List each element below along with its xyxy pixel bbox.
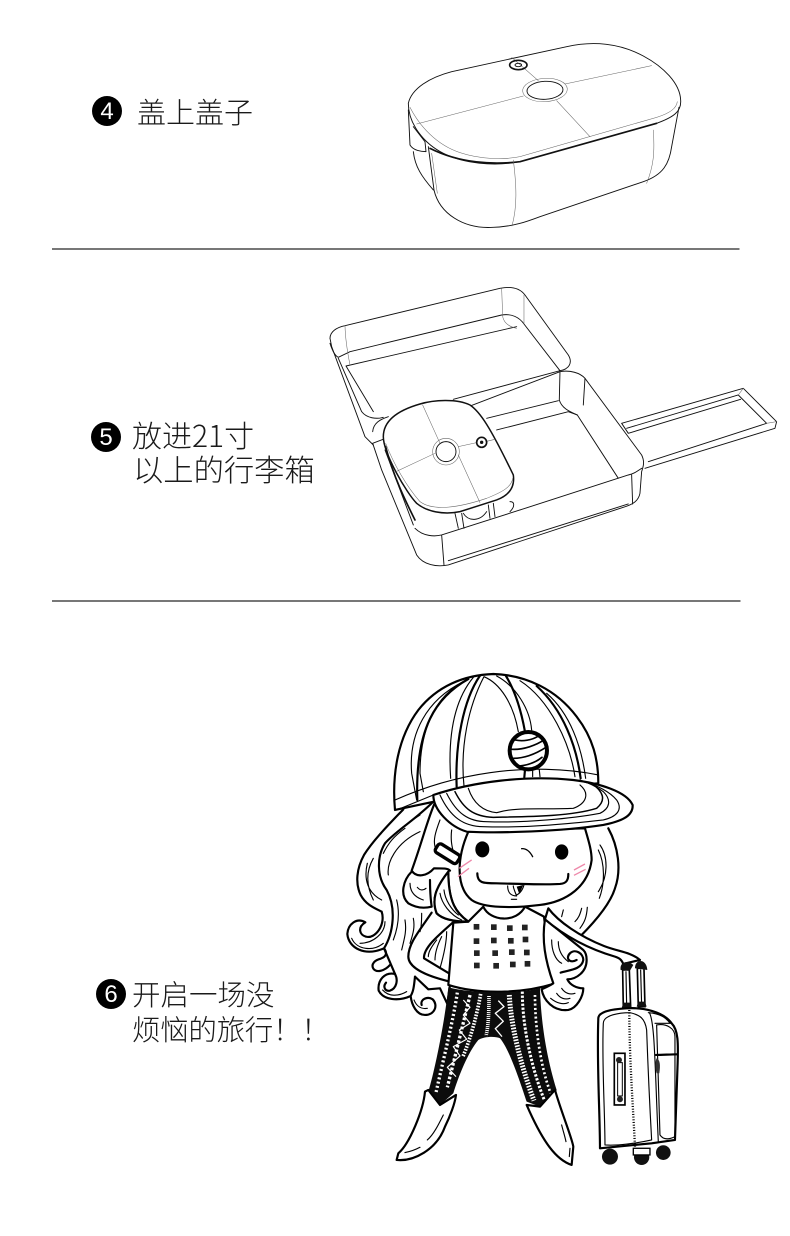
illustration: lunch box in open suitcase — [330, 287, 777, 566]
right boot — [527, 1090, 573, 1165]
suitcase — [598, 961, 678, 1165]
step 5 heading: 以上的行李箱 — [133, 446, 315, 490]
lower shell — [373, 371, 644, 566]
upper shell — [330, 287, 570, 399]
eyes — [475, 841, 568, 860]
left boot — [397, 1090, 456, 1160]
step 5 heading — [91, 412, 315, 490]
illustration: closed lunch box — [408, 44, 681, 227]
hair left — [347, 802, 468, 1015]
handle — [623, 968, 645, 1007]
shirt studs — [474, 924, 530, 969]
shirt — [448, 907, 553, 992]
step 5 text: 放进21寸 — [132, 412, 254, 456]
divider 2 — [52, 600, 740, 602]
number badge 6: 6 — [104, 981, 118, 1008]
front hair lock — [434, 872, 468, 922]
divider 1 — [52, 248, 740, 250]
telescopic handle — [622, 388, 777, 468]
wheels — [602, 1145, 671, 1165]
number badge 4 — [92, 96, 122, 126]
hair right and arm — [542, 828, 640, 1010]
mouth — [477, 873, 568, 884]
step 6 heading: 烦恼的旅行！！ — [132, 1008, 329, 1049]
cap — [394, 674, 633, 832]
body — [598, 1008, 678, 1148]
illustration: girl with cap and suitcase — [347, 674, 678, 1165]
number badge 4: 4 — [100, 98, 114, 125]
step 4 heading — [92, 90, 253, 132]
number badge 5 — [91, 422, 121, 452]
cap button — [510, 732, 547, 769]
luggage plate — [614, 1053, 625, 1105]
face — [458, 828, 592, 907]
number badge 5: 5 — [99, 424, 113, 451]
step 4 text: 盖上盖子 — [137, 90, 253, 132]
step 6 text: 开启一场没 — [132, 973, 275, 1014]
step 6 heading — [96, 973, 329, 1049]
number badge 6 — [96, 979, 126, 1009]
lunch box — [383, 400, 514, 528]
hair clip — [434, 843, 461, 865]
blush — [458, 860, 586, 877]
patterned leggings — [428, 987, 557, 1107]
